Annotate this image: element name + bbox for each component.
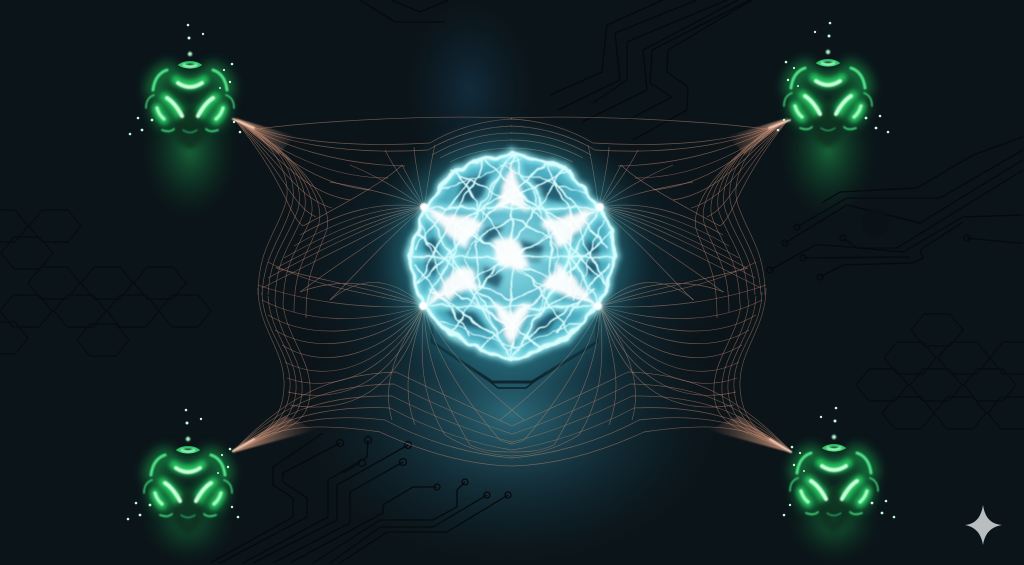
sparkle watermark [965, 505, 1002, 545]
orb glow strands [408, 153, 615, 360]
circuit traces: bottom left [210, 433, 511, 563]
filament web: bottom left [232, 262, 524, 466]
node: top right [777, 22, 889, 148]
circuit traces: right [767, 137, 1023, 280]
orb bright star core [425, 162, 598, 350]
background glow: centre column [296, 0, 726, 565]
node: top left [129, 24, 241, 150]
filament web: top right [511, 117, 788, 318]
node: bottom right [783, 407, 895, 533]
filament web: bottom right [500, 262, 792, 466]
filament fans at node connectors [232, 118, 792, 453]
hexagon grid: right [856, 314, 1024, 429]
orb glint points [419, 203, 604, 310]
circuit traces: top centre [360, 0, 448, 22]
connector glows at nodes [233, 119, 791, 452]
hexagonal platform under orb [432, 322, 597, 388]
vertical green glows under nodes [140, 80, 882, 565]
hexagon grid: left [0, 210, 211, 356]
central orb [393, 138, 629, 374]
circuit traces: top right [550, 0, 752, 140]
orb dark patches [424, 174, 600, 336]
filament web: top left [235, 117, 512, 318]
orb lightning strands [408, 153, 615, 360]
node: bottom left [127, 409, 239, 535]
